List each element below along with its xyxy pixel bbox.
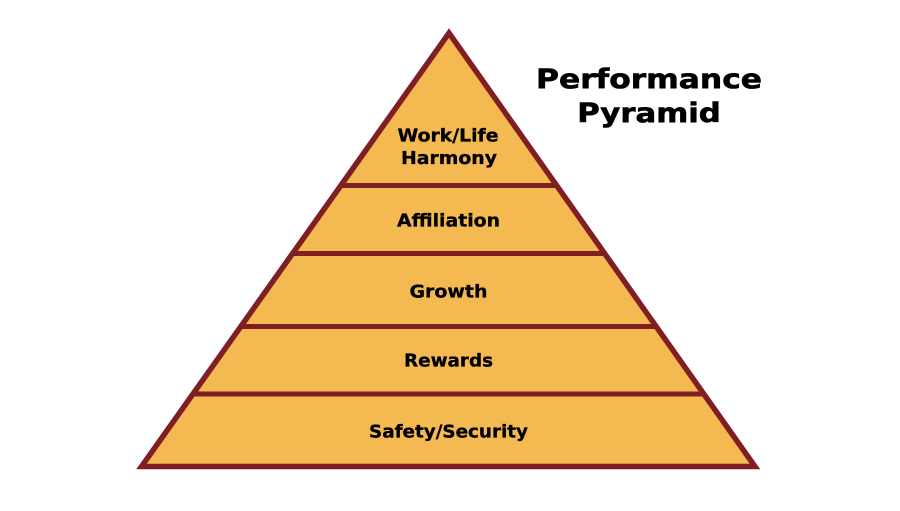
tier label: Rewards: Rewards	[404, 350, 493, 372]
tier label: Affiliation: Affiliation	[397, 210, 500, 232]
pyramid body	[142, 33, 755, 466]
title: Performance	[536, 63, 762, 94]
tier label: Work/Life Harmony	[398, 126, 498, 169]
pyramid	[142, 33, 755, 466]
tier divider: top	[341, 183, 557, 188]
tier label: Growth: Growth	[410, 282, 488, 302]
tier divider: rewards	[193, 392, 704, 396]
tier divider: affiliation	[294, 251, 605, 256]
tier label: Work/Life Harmony: Work/Life	[398, 126, 498, 146]
tier divider: growth	[241, 324, 657, 329]
title	[536, 63, 762, 129]
title: Pyramid	[577, 97, 721, 129]
tier label: Safety/Security: Safety/Security	[369, 422, 528, 442]
tier label: Work/Life Harmony: Harmony	[401, 148, 497, 169]
